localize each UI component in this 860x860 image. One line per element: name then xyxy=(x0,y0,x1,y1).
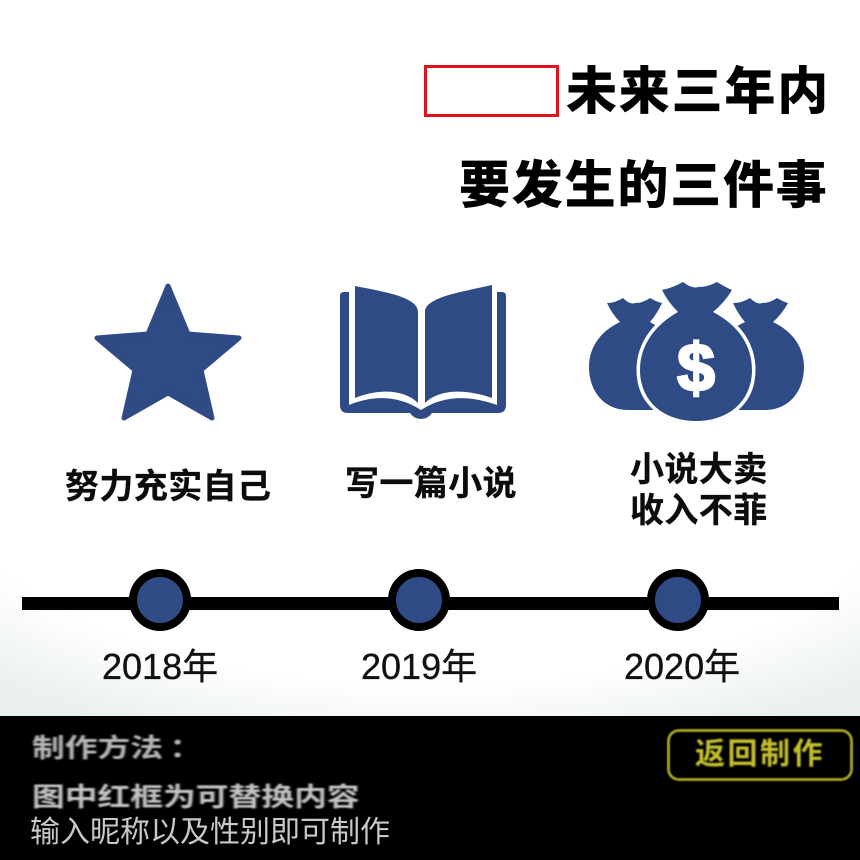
right bag xyxy=(710,298,804,410)
year 2018: 2018年 xyxy=(102,646,218,687)
marker 2019 xyxy=(392,573,446,627)
label: 2020 event: 收入不菲 xyxy=(630,492,768,530)
year 2019: 2019年 xyxy=(361,646,477,687)
button: back xyxy=(667,729,853,781)
background tint xyxy=(0,440,860,716)
text: input note: 输入昵称以及性别即可制作 xyxy=(30,816,390,849)
marker 2020 xyxy=(651,573,705,627)
label: 2018 event: 努力充实自己 xyxy=(65,468,271,506)
label: 2020 event xyxy=(630,451,768,530)
left bag xyxy=(589,298,680,410)
year 2020: 2020年 xyxy=(624,646,740,687)
label: 2019 event: 写一篇小说 xyxy=(345,465,517,503)
dollar sign: $ xyxy=(677,330,715,406)
placeholder: red name box xyxy=(424,65,559,117)
title line 1: 未来三年内 xyxy=(566,63,830,120)
marker 2018 xyxy=(133,573,187,627)
center bag xyxy=(640,282,752,421)
panel: instructions xyxy=(0,716,860,860)
button label: 返回制作 xyxy=(695,738,825,771)
heading: method: 制作方法： xyxy=(32,733,202,763)
title line 2: 要发生的三件事 xyxy=(459,157,829,214)
text: red box note: 图中红框为可替换内容 xyxy=(32,782,360,812)
label: 2020 event: 小说大卖 xyxy=(630,451,768,489)
